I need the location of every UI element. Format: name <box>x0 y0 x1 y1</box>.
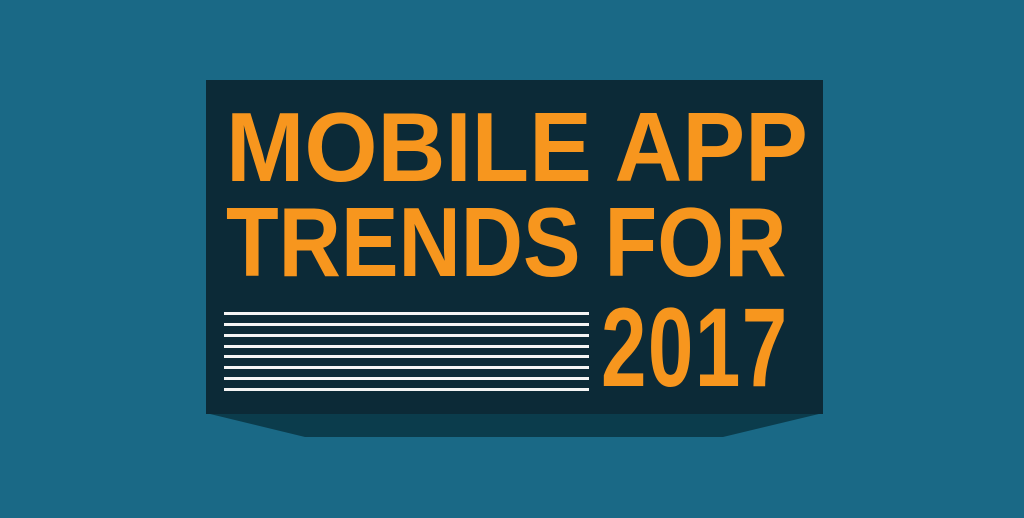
year 2017: 2017 <box>601 285 789 410</box>
title line 1: MOBILE APP <box>226 92 808 202</box>
panel body <box>206 80 823 414</box>
title line 2: TRENDS FOR <box>226 187 787 297</box>
decorative stripes <box>224 312 589 391</box>
